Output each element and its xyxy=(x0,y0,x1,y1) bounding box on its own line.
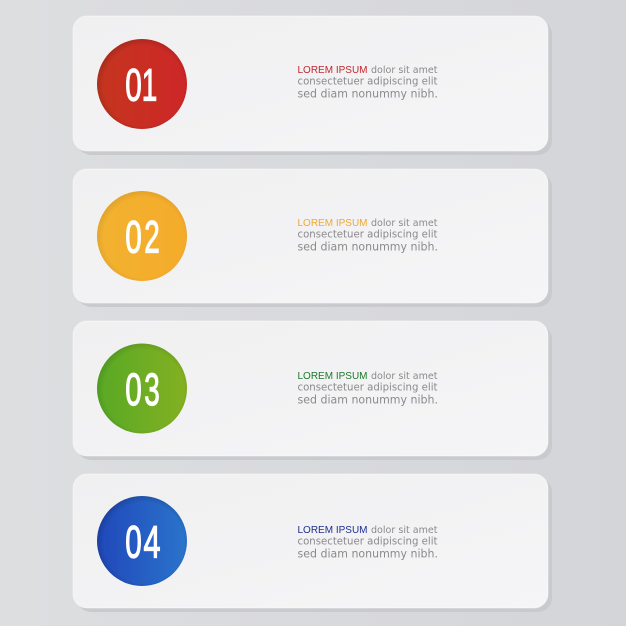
text block: step 02: consectetuer adipiscing elit xyxy=(298,228,438,240)
icon: red number circle: 0 xyxy=(125,60,142,111)
text block: step 03: dolor sit amet xyxy=(371,371,438,382)
icon: blue number circle xyxy=(97,496,187,586)
text block: step 01: LOREM IPSUM xyxy=(298,64,368,76)
text block: step 03: consectetuer adipiscing elit xyxy=(298,382,438,394)
icon: green number circle: 0 xyxy=(125,365,142,416)
text block: step 04: dolor sit amet xyxy=(371,525,438,536)
icon: blue number circle: 4 xyxy=(143,518,161,568)
icon: yellow number circle: 0 xyxy=(125,212,142,263)
icon: red number circle: 1 xyxy=(142,60,157,110)
panel: step 01 xyxy=(73,16,552,155)
text block: step 01: dolor sit amet xyxy=(371,65,438,76)
icon: yellow number circle: 2 xyxy=(144,212,160,262)
text block: step 02: dolor sit amet xyxy=(371,218,438,229)
text block: step 01: consectetuer adipiscing elit xyxy=(298,76,438,88)
text block: step 04: sed diam nonummy nibh. xyxy=(298,546,438,560)
icon: green number circle xyxy=(97,344,187,434)
text block: step 03: sed diam nonummy nibh. xyxy=(298,392,438,406)
icon: red number circle xyxy=(97,39,187,129)
text block: step 01 xyxy=(298,64,438,100)
text block: step 04 xyxy=(298,524,438,560)
icon: blue number circle: 0 xyxy=(125,517,142,568)
panel: step 03 xyxy=(73,321,552,460)
text block: step 02 xyxy=(298,217,438,254)
panel: step 02 xyxy=(73,169,552,307)
text block: step 02: sed diam nonummy nibh. xyxy=(298,240,438,254)
text block: step 02: LOREM IPSUM xyxy=(298,217,368,229)
text block: step 03 xyxy=(298,370,438,406)
text block: step 01: sed diam nonummy nibh. xyxy=(298,86,438,100)
text block: step 04: LOREM IPSUM xyxy=(298,524,368,536)
icon: yellow number circle xyxy=(97,191,187,281)
text block: step 04: consectetuer adipiscing elit xyxy=(298,536,438,548)
panel: step 04 xyxy=(73,474,552,612)
icon: green number circle: 3 xyxy=(144,364,160,415)
text block: step 03: LOREM IPSUM xyxy=(298,370,368,382)
